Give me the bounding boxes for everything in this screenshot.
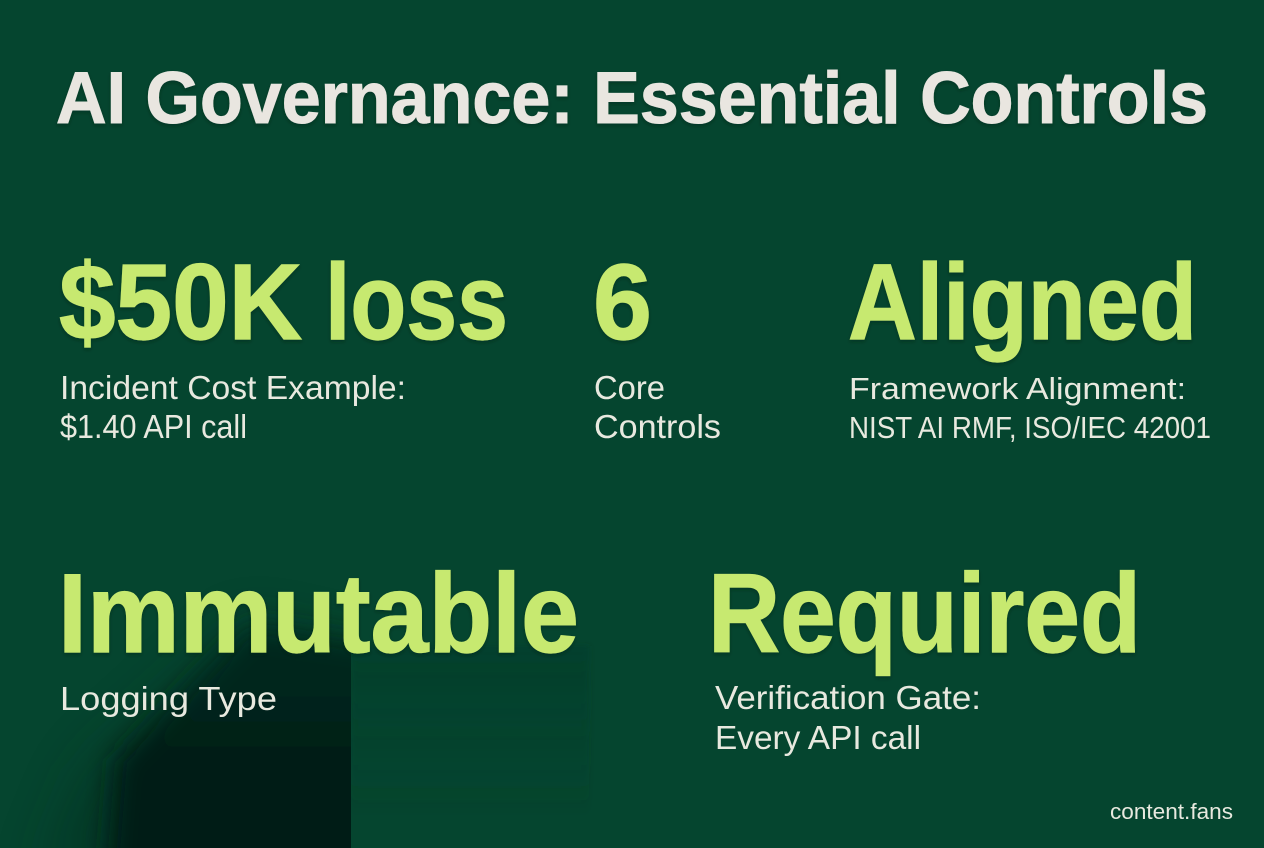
stat: incident cost	[59, 241, 508, 445]
source credit: content.fans	[1110, 799, 1233, 824]
label: incident cost: $1.40 API call	[60, 408, 247, 445]
stat: core controls: Core	[594, 369, 665, 406]
label: incident cost: Incident Cost Example:	[60, 369, 406, 406]
stat: core controls: 6	[593, 241, 652, 362]
stat: core controls: Controls	[594, 408, 721, 445]
big value: $50K loss	[59, 241, 508, 362]
stat: framework alignment: Framework Alignment:	[849, 371, 1186, 406]
big value: $50K loss: loss	[325, 241, 508, 362]
stat: framework alignment: NIST AI RMF, ISO/IEC 42001	[849, 410, 1211, 445]
stat: verification gate: Required	[708, 551, 1141, 676]
stat: verification gate: Verification Gate:	[715, 679, 981, 716]
title: AI Governance: Essential Controls	[56, 58, 1208, 139]
cast shadow, faint block	[351, 646, 589, 816]
cast shadow, dark block	[72, 617, 351, 848]
big value: $50K loss: $50K	[59, 241, 302, 362]
stat: verification gate	[708, 551, 1141, 756]
stat: verification gate: Every API call	[715, 719, 921, 756]
stat: logging type: Immutable	[58, 551, 579, 676]
stat: core controls	[593, 241, 721, 445]
label: incident cost	[60, 369, 406, 445]
stat: logging type: Logging Type	[60, 680, 277, 717]
stat: framework alignment	[848, 241, 1211, 445]
stat: framework alignment: Aligned	[848, 241, 1197, 362]
